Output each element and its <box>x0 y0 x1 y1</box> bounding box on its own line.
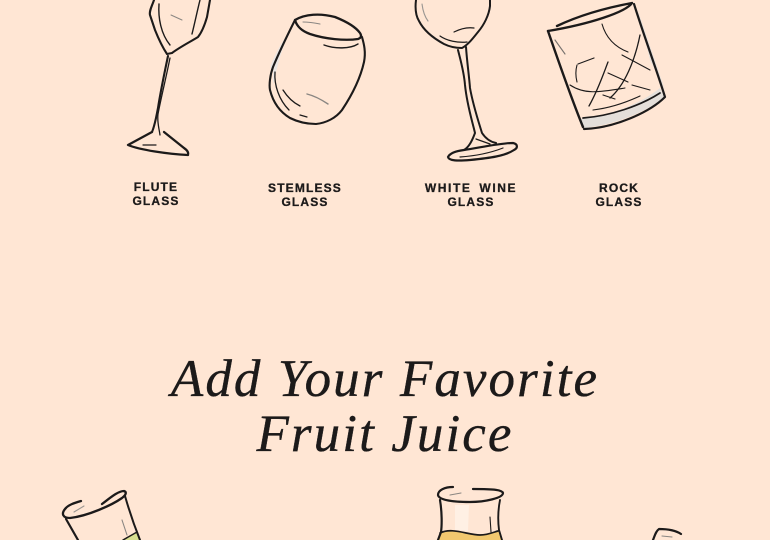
label: rock glass: GLASS <box>595 194 643 208</box>
title <box>168 350 599 463</box>
icon: white wine glass <box>416 0 517 161</box>
label: flute glass: GLASS <box>132 194 180 208</box>
label: white wine glass <box>424 181 517 208</box>
label: flute glass: FLUTE <box>134 180 178 194</box>
icon: juice glass left <box>63 491 141 540</box>
icon: juice glass middle <box>438 487 503 540</box>
label: flute glass <box>132 180 180 208</box>
title: Add Your Favorite <box>171 350 599 408</box>
title: Fruit Juice <box>256 405 514 463</box>
label: rock glass: ROCK <box>599 181 639 195</box>
label: stemless glass: STEMLESS <box>268 181 342 195</box>
label: white wine glass: WHITE WINE <box>425 181 517 195</box>
label: stemless glass <box>268 181 342 208</box>
icon: stemless glass <box>270 15 365 124</box>
label: white wine glass: GLASS <box>447 194 495 208</box>
label: rock glass <box>595 181 643 208</box>
label: stemless glass: GLASS <box>281 194 329 208</box>
icon: juice glass right <box>653 529 681 540</box>
icon: flute glass <box>128 0 210 155</box>
icon: rock glass <box>548 3 665 129</box>
